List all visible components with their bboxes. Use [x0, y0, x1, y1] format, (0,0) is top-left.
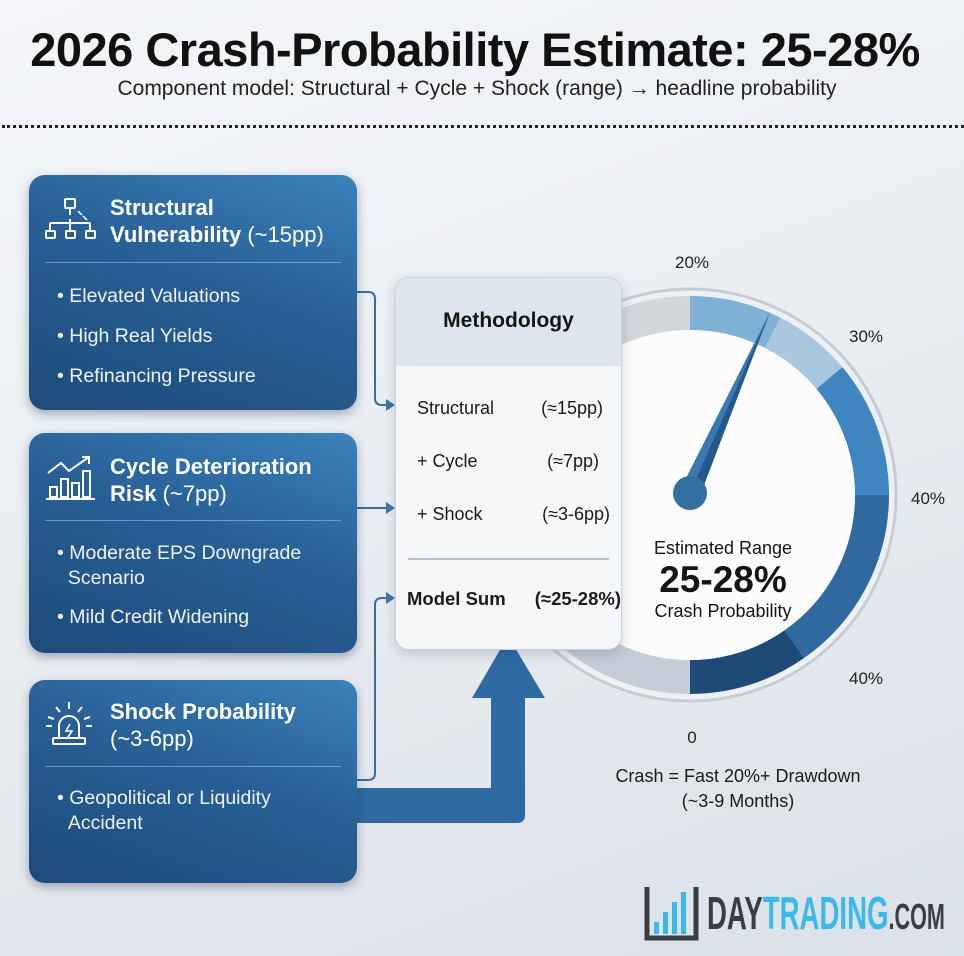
footnote: (~3-9 Months): [682, 791, 794, 811]
card: shock: (~3-6pp): [110, 726, 194, 751]
big arrow: [357, 636, 545, 823]
card: shock: [29, 680, 357, 883]
logo: DAYTRADING.COM: [707, 887, 945, 939]
card: cycle: • Mild Credit Widening: [57, 606, 249, 628]
methodology panel: Structural: [417, 398, 494, 418]
methodology panel: (≈25-28%): [535, 588, 621, 609]
card: structural: Structural: [110, 195, 214, 220]
methodology panel: + Cycle: [417, 451, 478, 471]
needle: [673, 312, 770, 510]
icon: hierarchy: [45, 198, 96, 239]
gauge center text: Estimated Range: [654, 538, 792, 558]
title: 2026 Crash-Probability Estimate: 25-28%: [30, 23, 920, 76]
gauge center text: Crash Probability: [654, 601, 792, 621]
gauge labels: 30%: [849, 327, 883, 346]
footnote: Crash = Fast 20%+ Drawdown: [615, 766, 861, 786]
card: cycle: Scenario: [68, 567, 145, 589]
card: structural: • High Real Yields: [57, 325, 212, 347]
card: shock: Accident: [68, 812, 143, 834]
card: cycle: Cycle Deterioration: [110, 454, 312, 479]
card: structural: • Refinancing Pressure: [57, 365, 256, 387]
gauge labels: 20%: [675, 253, 709, 272]
subtitle: Component model: Structural + Cycle + Shock (range) → headline probability: [117, 77, 837, 100]
card: shock: • Geopolitical or Liquidity: [57, 787, 271, 809]
methodology panel: Model Sum: [407, 588, 506, 609]
icon: bar chart: [46, 456, 95, 500]
gauge labels: 40%: [911, 489, 945, 508]
card: structural: Vulnerability (~15pp): [110, 222, 324, 247]
footnote: [615, 766, 861, 811]
card: shock: Shock Probability: [110, 699, 296, 724]
methodology panel: (≈15pp): [541, 398, 603, 418]
gauge center text: [654, 538, 792, 621]
gauge labels: 40%: [849, 669, 883, 688]
methodology panel: + Shock: [417, 504, 483, 524]
card: structural: • Elevated Valuations: [57, 285, 240, 307]
gauge labels: 0: [687, 728, 697, 747]
methodology panel: (≈7pp): [547, 451, 599, 471]
methodology panel: Methodology: [443, 309, 574, 332]
gauge center text: 25-28%: [659, 559, 787, 600]
gauge labels: [675, 253, 945, 747]
card: cycle: • Moderate EPS Downgrade: [57, 542, 301, 564]
card: cycle: [29, 433, 357, 653]
methodology panel: (≈3-6pp): [542, 504, 610, 524]
card: structural: [29, 175, 357, 410]
icon: alarm: [46, 702, 92, 745]
card: cycle: Risk (~7pp): [110, 481, 227, 506]
methodology panel: [395, 277, 622, 650]
